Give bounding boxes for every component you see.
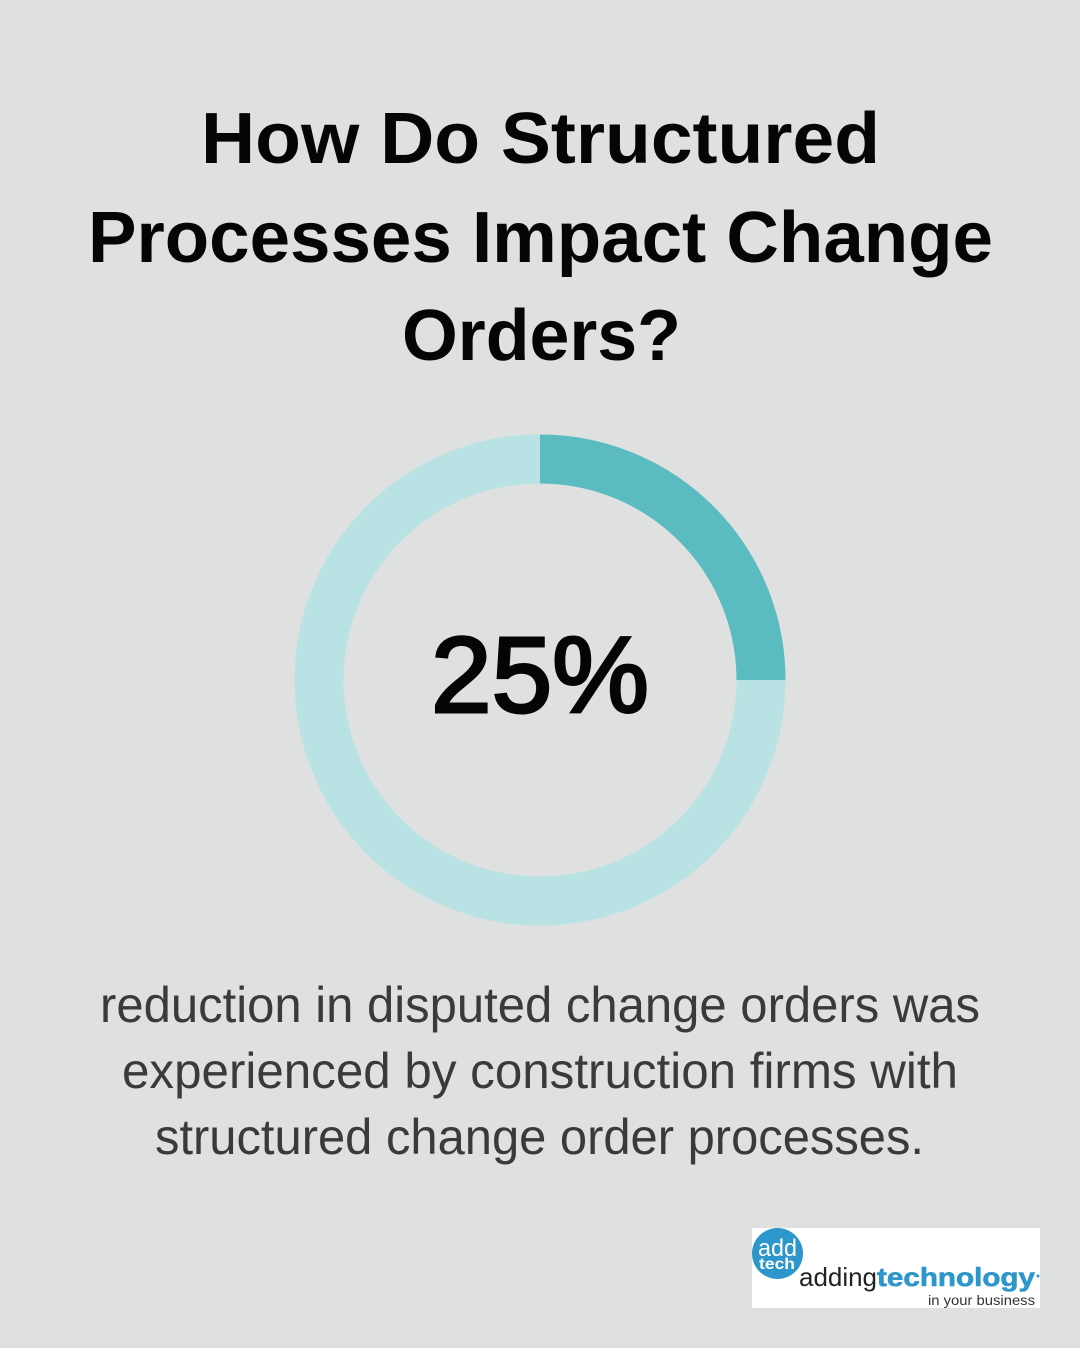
logo: adding technology: technology [877, 1262, 1036, 1292]
description text: reduction in disputed change orders was [100, 977, 980, 1033]
title [88, 99, 993, 376]
logo wordmark: adding [799, 1262, 877, 1292]
logo: adding technology [752, 1228, 1040, 1308]
logo tagline: in your business [928, 1292, 1035, 1308]
icon: add tech circle: add [758, 1235, 797, 1262]
title: Processes Impact Change [88, 198, 993, 278]
title: Orders? [402, 296, 681, 376]
icon: add tech circle: tech [759, 1256, 795, 1273]
description text: structured change order processes. [155, 1109, 924, 1165]
icon: add tech circle [752, 1228, 803, 1279]
donut chart: 25% [319, 459, 761, 901]
description text: experienced by construction firms with [122, 1043, 958, 1099]
description text [100, 977, 980, 1165]
value: 25%: 25% [431, 614, 649, 735]
title: How Do Structured [201, 99, 880, 179]
